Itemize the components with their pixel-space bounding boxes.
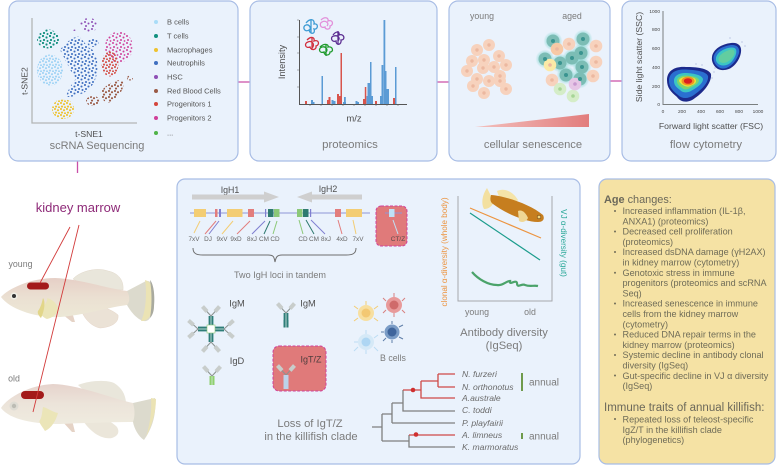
callout: CT/Z locus bbox=[376, 206, 407, 246]
IgH locus diagram bbox=[188, 209, 370, 243]
heading: IgH1: IgH1 bbox=[221, 185, 239, 195]
B cell: yellow bbox=[354, 301, 378, 321]
heading: kidney marrow: kidney marrow bbox=[36, 200, 121, 215]
list: age changes: cells from the kidney marrow bbox=[622, 309, 739, 319]
species labels bbox=[461, 369, 519, 452]
list: age changes: Gut-specific decline in VJ α diversity bbox=[622, 371, 769, 381]
panel: cellular senescence bbox=[449, 1, 610, 161]
panel title: cellular senescence: cellular senescence bbox=[484, 139, 582, 151]
antibody: IgM monomer bbox=[278, 304, 294, 328]
list: immune traits: Repeated loss of teleost-specific bbox=[622, 414, 754, 424]
density scatter plot: 600 bbox=[716, 109, 724, 115]
legend: cell types: Macrophages bbox=[167, 46, 213, 55]
list: age changes: (cytometry) bbox=[622, 319, 668, 329]
axis label: m/z: m/z bbox=[346, 114, 362, 124]
legend: cell types bbox=[154, 18, 221, 138]
legend: cell types: HSC bbox=[167, 73, 183, 82]
aged cells bbox=[536, 30, 602, 102]
list: age changes: Increased dsDNA damage (γH2AX) bbox=[622, 247, 766, 257]
density scatter plot: 400 bbox=[652, 65, 660, 71]
IgH locus diagram: CD bbox=[270, 236, 280, 243]
density scatter plot: 400 bbox=[697, 109, 705, 115]
IgH locus diagram: CD bbox=[298, 236, 308, 243]
heading: age changes: Age changes: bbox=[604, 194, 672, 206]
mass spectrum chart bbox=[297, 20, 407, 106]
B cell: red bbox=[383, 293, 405, 317]
callout: IgT/Z bbox=[273, 346, 326, 391]
B cell: light blue bbox=[354, 330, 378, 354]
IgH locus diagram: CM bbox=[259, 236, 269, 243]
IgH locus diagram: 4xD bbox=[336, 236, 348, 243]
label: antibody diversity: (IgSeq) bbox=[486, 340, 523, 352]
label: aged: aged bbox=[562, 11, 582, 21]
IgH locus diagram: 7xV bbox=[188, 236, 200, 243]
annual marker: top: annual bbox=[529, 378, 559, 388]
legend: cell types: Progenitors 2 bbox=[167, 114, 212, 123]
wedge: increasing senescence bbox=[475, 114, 589, 127]
list: age changes: Reduced DNA repair terms in the bbox=[622, 330, 756, 340]
list: age changes: Genotoxic stress in immune bbox=[622, 268, 735, 278]
label: young: young bbox=[465, 307, 489, 317]
species labels: A.australe bbox=[461, 393, 501, 403]
label: loss of IgT/Z: in the killifish clade bbox=[264, 431, 358, 443]
legend: cell types: Progenitors 1 bbox=[167, 100, 212, 109]
density scatter plot: 1000 bbox=[753, 109, 764, 115]
density scatter plot: 0 bbox=[662, 109, 665, 115]
kidney marrow pointer lines bbox=[33, 225, 79, 412]
brace: two loci bbox=[193, 248, 356, 262]
icon: protein structures bbox=[304, 18, 344, 56]
panel: flow cytometry bbox=[622, 1, 776, 161]
axis label: forward light scatter: Forward light scatter (FSC) bbox=[659, 121, 763, 131]
label: antibody diversity: Antibody diversity bbox=[460, 327, 548, 339]
list: age changes: Increased senescence in immune bbox=[622, 299, 758, 309]
heading: IgH2: IgH2 bbox=[319, 184, 337, 194]
species labels: C. toddi bbox=[462, 405, 493, 415]
IgH locus diagram: 9xD bbox=[230, 236, 242, 243]
IgH locus diagram: 8xJ bbox=[321, 236, 331, 243]
axis label: VJ diversity: VJ α-diversity (gut) bbox=[559, 209, 568, 277]
list: age changes: Increased inflammation (IL-1β, bbox=[622, 206, 746, 216]
label: loss of IgT/Z: Loss of IgT/Z bbox=[277, 418, 343, 430]
label: IgM pentamer: IgM bbox=[229, 298, 245, 308]
t-SNE scatter plot bbox=[32, 18, 137, 123]
icon: gold fish bbox=[482, 188, 544, 222]
density scatter plot: 1000 bbox=[649, 9, 660, 15]
axis label: clonal diversity: clonal α-diversity (whole body) bbox=[440, 197, 449, 307]
diversity line chart bbox=[458, 196, 552, 301]
species labels: A. limneus bbox=[461, 430, 503, 440]
density scatter plot: 800 bbox=[652, 27, 660, 33]
species labels: K. marmoratus bbox=[462, 442, 519, 452]
list: age changes: kidney marrow (proteomics) bbox=[622, 340, 735, 350]
young cells bbox=[461, 39, 512, 99]
B cell: dark blue bbox=[381, 321, 403, 343]
IgH locus diagram: 9xV bbox=[216, 236, 228, 243]
arrow: IgH1 direction bbox=[192, 192, 279, 202]
connector lines between panels bbox=[78, 81, 622, 173]
density scatter plot bbox=[649, 9, 764, 115]
list: age changes: Systemic decline in antibody clonal bbox=[622, 350, 764, 360]
list: age changes: diversity (IgSeq) bbox=[622, 360, 688, 370]
label: young: young bbox=[470, 11, 494, 21]
axis label: t-SNE2: t-SNE2 bbox=[20, 67, 30, 95]
axis label: Intensity: Intensity bbox=[277, 44, 287, 79]
list: age changes: ANXA1) (proteomics) bbox=[622, 216, 708, 226]
axis label: t-SNE1: t-SNE1 bbox=[75, 129, 103, 139]
panel: proteomics bbox=[250, 1, 437, 161]
arrow: IgH2 direction bbox=[297, 192, 362, 202]
list: age changes: in kidney marrow (cytometry) bbox=[622, 258, 739, 268]
callout: CT/Z locus: CT/Z bbox=[391, 236, 405, 243]
label: IgD: IgD bbox=[230, 356, 245, 366]
list: age changes: (IgSeq) bbox=[622, 381, 652, 391]
legend: cell types: ... bbox=[167, 129, 173, 138]
icon: old fish bbox=[1, 381, 156, 440]
IgH locus diagram: CM bbox=[309, 236, 319, 243]
heading: immune traits: Immune traits of annual killifish: bbox=[604, 402, 764, 414]
IgH locus diagram: DJ bbox=[204, 236, 212, 243]
legend: cell types: B cells bbox=[167, 18, 189, 27]
legend: cell types: Red Blood Cells bbox=[167, 87, 221, 96]
density scatter plot: 200 bbox=[652, 84, 660, 90]
list: age changes: progenitors (proteomics and scRNA bbox=[622, 278, 767, 288]
label: old fish: old bbox=[8, 374, 20, 384]
axis label: side light scatter: Side light scatter (SSC) bbox=[634, 12, 644, 102]
species labels: N. orthonotus bbox=[462, 382, 514, 392]
annual marker: top bbox=[521, 373, 559, 391]
IgH locus diagram: 7xV bbox=[352, 236, 364, 243]
list: age changes: Decreased cell proliferation bbox=[622, 227, 733, 237]
panel: antibody biology bbox=[177, 179, 580, 464]
antibody: IgD bbox=[204, 366, 220, 385]
IgH locus diagram: 8xJ bbox=[247, 236, 257, 243]
label: B cells: B cells bbox=[380, 353, 407, 363]
list: age changes: (proteomics) bbox=[622, 237, 673, 247]
annual marker: bottom: annual bbox=[529, 432, 559, 442]
antibody: IgM pentamer bbox=[188, 306, 234, 352]
panel: scRNA sequencing bbox=[9, 1, 238, 161]
density scatter plot: 0 bbox=[657, 102, 660, 108]
density scatter plot: 200 bbox=[678, 109, 686, 115]
phylogenetic tree bbox=[372, 374, 455, 447]
label: old: old bbox=[524, 307, 536, 317]
list: age changes: Seq) bbox=[622, 288, 642, 298]
icon: young fish bbox=[1, 269, 154, 328]
list: age changes bbox=[614, 206, 769, 391]
panel title: proteomics: proteomics bbox=[322, 139, 378, 151]
density scatter plot: 600 bbox=[652, 46, 660, 52]
label: two IgH loci in tandem: Two IgH loci in tandem bbox=[234, 270, 326, 280]
list: immune traits bbox=[614, 414, 754, 445]
density scatter plot: 800 bbox=[735, 109, 743, 115]
species labels: N. furzeri bbox=[462, 369, 498, 379]
legend: cell types: T cells bbox=[167, 32, 189, 41]
panel title: flow cytometry: flow cytometry bbox=[670, 139, 742, 151]
list: immune traits: (phylogenetics) bbox=[622, 435, 684, 445]
callout: IgT/Z: IgT/Z bbox=[300, 354, 322, 364]
label: IgM monomer: IgM bbox=[300, 298, 316, 308]
list: immune traits: IgZ/T in the killifish clade bbox=[622, 425, 722, 435]
species labels: P. playfairii bbox=[462, 418, 504, 428]
panel title: scRNA Sequencing: scRNA Sequencing bbox=[50, 140, 144, 152]
panel: summary of immune traits bbox=[599, 179, 775, 464]
legend: cell types: Neutrophils bbox=[167, 59, 205, 68]
label: young fish: young bbox=[9, 259, 33, 269]
